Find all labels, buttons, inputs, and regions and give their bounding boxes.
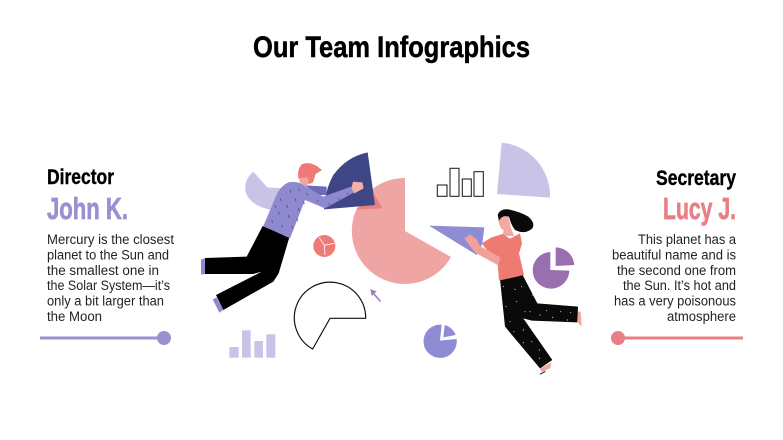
shoe line [540,371,545,374]
text block: secretary description: the second one from [617,263,736,278]
chart: small red pie [313,235,335,257]
chart: purple pie [533,247,574,289]
text block: director description: the smallest one in [47,263,159,278]
illustration: left group, charts around man [201,152,382,358]
slider line with dot: director [40,331,171,345]
woman front foot [540,363,552,372]
woman trousers [500,275,578,368]
text block: director description [47,232,174,324]
man trousers and shoes [201,226,289,313]
chart: blue pie [423,325,457,358]
chart: lavender quarter pie [497,143,550,198]
woman back foot [577,312,582,327]
text block: secretary description [612,232,737,324]
text block: director description: the Solar System—it’s [47,278,170,293]
figure: woman upper body [429,209,533,281]
chart: salmon piece under blue wedge [357,195,382,210]
woman hands and forearm [464,234,500,265]
man hair [298,163,322,184]
heading: role director: Director [47,166,114,189]
man sweater [263,182,354,238]
text block: secretary description: atmosphere [667,309,736,324]
chart: black outline pie [294,282,366,349]
sweater pattern [272,188,348,229]
woman hair [498,209,533,232]
icon: arrow [371,290,381,302]
heading: name John K.: John K. [47,191,128,226]
chart: lavender pie behind man [245,172,285,211]
chart: big pink pie [352,178,451,284]
panel: director [40,166,174,345]
panel: secretary [611,167,743,345]
man face [298,174,312,186]
trousers dots [503,287,571,358]
text block: director description: Mercury is the closest [47,232,174,247]
text block: director description: planet to the Sun and [47,248,169,262]
heading: name Lucy J.: Lucy J. [663,191,736,226]
title: Our Team Infographics [253,31,530,64]
figure: man upper body [263,163,364,238]
heading: role secretary: Secretary [656,167,736,190]
text block: secretary description: beautiful name and is [612,248,736,262]
chart: lavender bar chart [229,330,275,358]
slider line with dot: secretary [611,331,743,345]
text block: director description: the Moon [47,309,102,324]
woman top [482,233,524,281]
chart: outline bar chart [437,168,483,196]
woman neck and face [498,216,514,236]
text block: director description: only a bit larger than [47,294,164,308]
illustration: right group, charts around woman [423,143,574,358]
text block: secretary description: the Sun. It’s hot and [623,278,736,293]
chart: dark blue wedge [324,152,375,209]
text block: secretary description: This planet has a [638,232,737,247]
text block: secretary description: has a very poisonous [614,294,736,308]
man back arm [305,185,327,195]
man hand [351,182,364,193]
figure: woman legs [500,275,582,374]
chart: purple triangle held by woman [429,226,484,255]
